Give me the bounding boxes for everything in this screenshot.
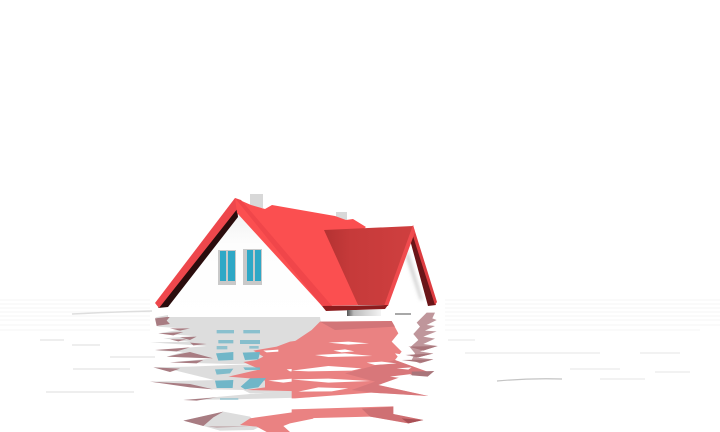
reflection: left dark ripple tips	[150, 317, 250, 427]
main roof gable edge	[235, 198, 332, 306]
reflection: far right ripple strip	[402, 313, 438, 377]
left roof edge	[155, 198, 238, 308]
reflection: windows	[215, 330, 266, 400]
dormer right underside	[410, 232, 436, 306]
reflection: left pink highlights	[263, 350, 310, 383]
reflection: left pink	[228, 338, 313, 432]
rear wall shadow	[406, 250, 423, 300]
window left	[218, 250, 236, 285]
rear wall	[387, 242, 428, 306]
dormer roof	[324, 226, 413, 305]
main roof	[235, 198, 366, 306]
house reflection	[150, 313, 438, 432]
house	[155, 194, 437, 317]
chimney left	[250, 194, 263, 208]
water ripples	[40, 311, 690, 392]
reflection: white highlights	[292, 342, 412, 392]
window right	[243, 249, 262, 285]
front wall	[168, 213, 323, 317]
chimney right	[336, 212, 347, 223]
left roof underside	[158, 207, 238, 308]
eave underside	[322, 305, 388, 311]
dormer edge	[384, 225, 415, 306]
reflection: right pink	[292, 313, 438, 423]
foundation post	[347, 310, 381, 316]
dormer right edge	[412, 225, 437, 305]
water surface	[0, 300, 720, 330]
debris	[395, 313, 411, 315]
reflection: walls and left side	[150, 315, 323, 432]
